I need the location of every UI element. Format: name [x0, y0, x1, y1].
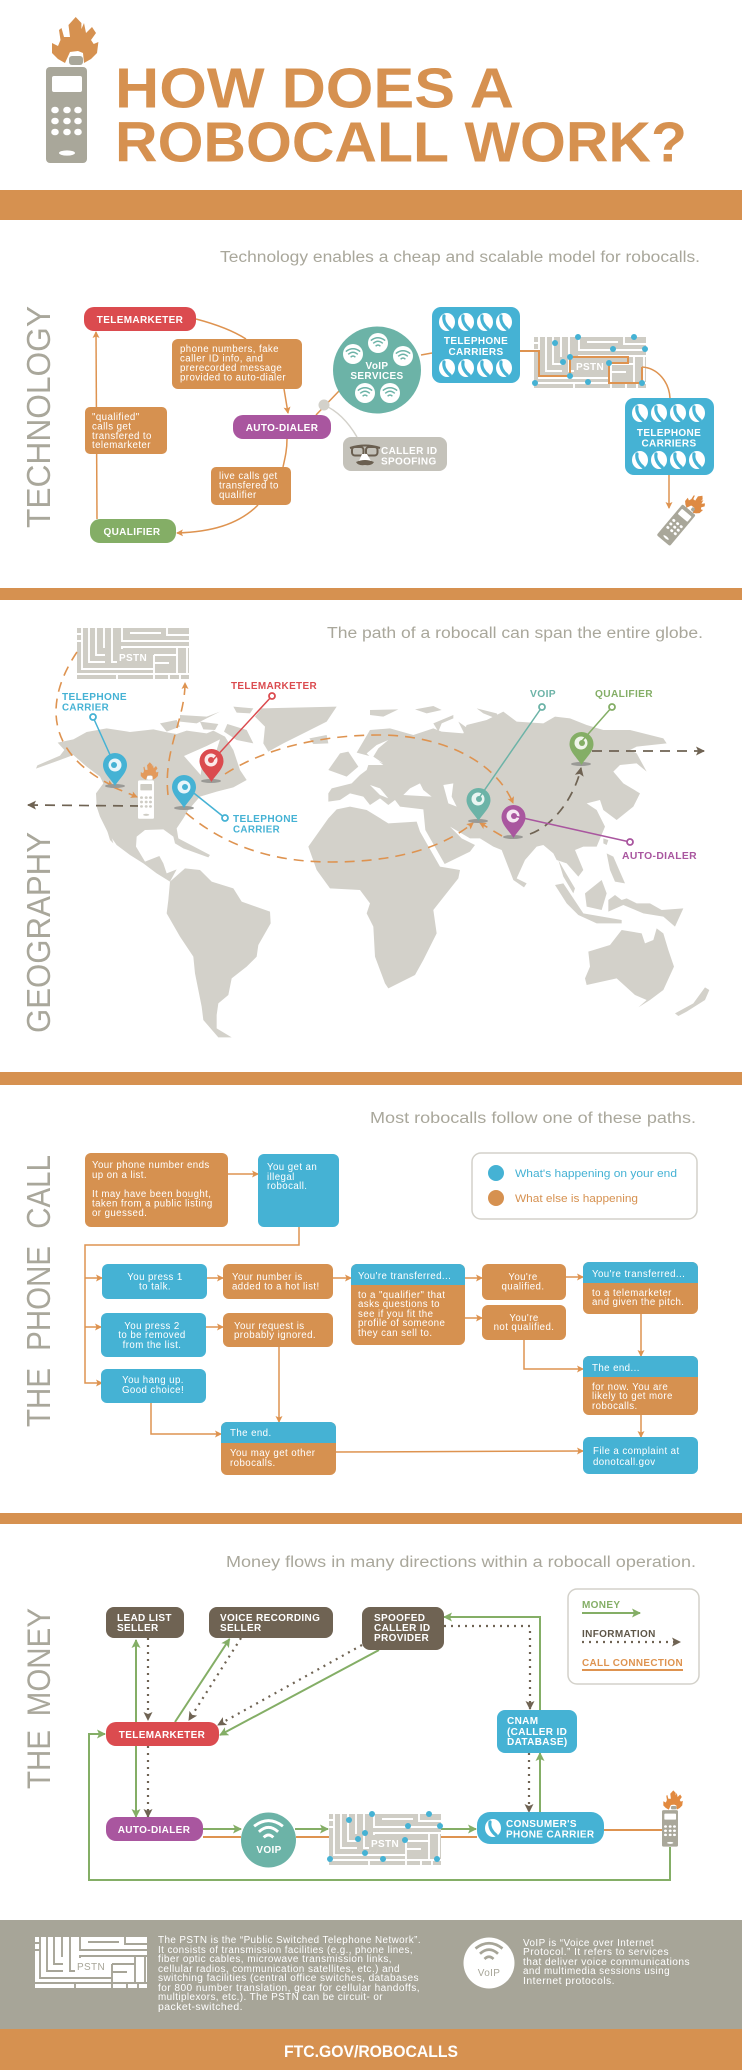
box: consumer's phone carrier: CONSUMER'S — [506, 1819, 577, 1830]
note: qualified calls: telemarketer — [92, 440, 151, 451]
box: the end for now: The end... — [592, 1363, 640, 1374]
graphic: pstn network — [327, 1811, 443, 1865]
box: transferred to qualifier: profile of someone — [358, 1318, 445, 1329]
legend: INFORMATION — [582, 1629, 656, 1640]
box: lead list seller: LEAD LIST — [117, 1613, 172, 1624]
box: press 1: You press 1 — [127, 1272, 183, 1283]
box: qualified: qualified. — [502, 1282, 544, 1292]
box: cnam — [497, 1710, 577, 1753]
box: caller id spoofing: SPOOFING — [381, 456, 437, 468]
pin: telephone carrier east — [172, 775, 298, 836]
box: auto-dialer — [233, 415, 331, 439]
graphic: pstn network — [520, 334, 648, 388]
note: inputs to auto-dialer: caller ID info, and — [180, 354, 263, 364]
legend — [472, 1153, 697, 1219]
box: transferred to qualifier: asks questions to — [358, 1299, 440, 1310]
box: telephone carriers 2 — [625, 398, 714, 475]
box: file a complaint — [583, 1437, 698, 1474]
box: spoofed caller id provider: PROVIDER — [374, 1633, 429, 1644]
subheading: the phone call: Most robocalls follow one of these paths. — [370, 1110, 696, 1127]
icon: burning phone — [662, 1790, 683, 1847]
arrow: pstn to carriers — [642, 367, 670, 398]
graphic: pstn network — [35, 1937, 147, 1988]
text: voip definition: and multimedia sessions using — [523, 1966, 670, 1977]
box: hot list: Your number is — [232, 1272, 303, 1283]
header band — [0, 190, 742, 220]
call connection lines — [203, 1830, 662, 1837]
box: telephone carriers — [432, 307, 520, 383]
icon: burning phone on map — [138, 762, 158, 819]
pin: qualifier — [570, 689, 653, 766]
dashed route: information — [28, 751, 704, 834]
box: lead list seller: SELLER — [117, 1623, 159, 1634]
label: telephone carrier: TELEPHONE — [233, 814, 298, 825]
box: press 2: You press 2 — [124, 1321, 180, 1332]
bubble: voip services: VoIP — [366, 361, 388, 372]
connector arrows: robocall loop — [96, 319, 432, 533]
box: transferred to qualifier — [351, 1264, 465, 1345]
text: pstn definition: fiber optic cables, microwave transmission links, — [158, 1954, 392, 1965]
subheading: the money: Money flows in many directions within a robocall operation. — [226, 1554, 696, 1571]
box: consumer's phone carrier — [477, 1812, 604, 1844]
box: voice recording seller: SELLER — [220, 1623, 262, 1634]
text: pstn definition: The PSTN is the “Public Switched Telephone Network”. — [158, 1935, 421, 1946]
icon: voip — [464, 1938, 514, 1988]
note: inputs to auto-dialer: prerecorded message — [180, 363, 282, 374]
box: qualifier — [90, 519, 176, 543]
information flows — [148, 1626, 530, 1817]
note: qualified calls: transfered to — [92, 431, 152, 442]
legend: MONEY — [582, 1600, 620, 1611]
graphic: pstn network: PSTN — [576, 362, 604, 373]
box: number on a list: It may have been bought, — [92, 1189, 211, 1200]
heading: technology: TECHNOLOGY — [20, 306, 57, 528]
box: the end — [221, 1422, 336, 1475]
box: illegal robocall: illegal — [267, 1172, 295, 1183]
icon: burning phone — [46, 17, 98, 163]
graphic: pstn network: PSTN — [119, 653, 147, 664]
heading: the phone call: THE PHONE CALL — [20, 1155, 57, 1427]
flow connectors — [85, 1174, 641, 1452]
box: caller id spoofing: CALLER ID — [381, 446, 437, 457]
box: hang up — [101, 1369, 206, 1403]
box: press 1: to talk. — [139, 1282, 171, 1292]
label: voip: VOIP — [530, 689, 556, 700]
section band — [0, 1513, 742, 1524]
section band — [0, 588, 742, 600]
pin: auto-dialer — [502, 805, 697, 862]
footer: url band — [0, 2029, 742, 2070]
box: illegal robocall — [258, 1154, 339, 1227]
note: live calls: transfered to — [219, 480, 279, 492]
legend: What else is happening — [515, 1193, 638, 1205]
title block — [46, 17, 687, 174]
legend — [568, 1589, 699, 1684]
text: voip definition: Internet protocols. — [523, 1976, 615, 1987]
title: ROBOCALL WORK? — [115, 110, 687, 174]
box: voice recording seller — [209, 1607, 333, 1638]
note: inputs to auto-dialer: provided to auto-dialer — [180, 372, 286, 384]
box: number on a list: up on a list. — [92, 1170, 147, 1181]
box: telemarketer — [84, 307, 196, 331]
text: pstn definition: packet-switched. — [158, 2002, 243, 2013]
icon: disguise glasses — [350, 446, 380, 465]
panel: the phone call — [20, 1110, 698, 1475]
box: qualifier: QUALIFIER — [103, 527, 161, 538]
note: live calls — [211, 467, 291, 505]
box: spoofed caller id provider — [362, 1607, 444, 1650]
note: live calls: qualifier — [219, 490, 257, 501]
box: consumer's phone carrier: PHONE CARRIER — [506, 1830, 595, 1840]
box: spoofed caller id provider: SPOOFED — [374, 1613, 425, 1624]
panel: technology — [20, 249, 714, 546]
bubble: voip: VOIP — [256, 1845, 282, 1856]
box: the end for now — [583, 1356, 698, 1415]
box: caller id spoofing — [343, 437, 447, 471]
footer: url band: FTC.GOV/ROBOCALLS — [284, 2042, 458, 2061]
box: telemarketer: TELEMARKETER — [119, 1730, 206, 1741]
note: qualified calls: calls get — [92, 422, 131, 432]
box: not qualified — [482, 1305, 566, 1340]
box: telephone carriers 2: TELEPHONE — [637, 428, 701, 439]
note: live calls: live calls get — [219, 471, 278, 482]
box: illegal robocall: robocall. — [267, 1181, 307, 1192]
box: transferred to telemarketer: You're transferred... — [592, 1269, 685, 1280]
box: not qualified: You're — [509, 1313, 539, 1324]
bubble: voip — [241, 1812, 296, 1868]
text: voip definition: Protocol.” It refers to services — [523, 1947, 669, 1958]
box: number on a list: taken from a public listing — [92, 1198, 213, 1210]
box: hang up: Good choice! — [122, 1385, 184, 1396]
box: the end: You may get other — [230, 1448, 316, 1459]
box: auto-dialer: AUTO-DIALER — [246, 423, 319, 434]
box: telephone carriers: CARRIERS — [448, 347, 504, 358]
panel: the money — [21, 1554, 699, 1880]
box: hot list — [223, 1264, 333, 1299]
legend: CALL CONNECTION — [582, 1658, 683, 1669]
title: HOW DOES A — [115, 56, 514, 120]
box: press 2: to be removed — [118, 1330, 186, 1341]
bubble: voip services: SERVICES — [350, 371, 404, 382]
box: request ignored: probably ignored. — [234, 1330, 316, 1341]
graphic: pstn network: PSTN — [371, 1839, 399, 1850]
note: inputs to auto-dialer — [172, 339, 302, 389]
box: the end: The end. — [230, 1428, 272, 1439]
box: cnam: DATABASE) — [507, 1737, 568, 1748]
box: press 2 — [101, 1313, 206, 1357]
box: voice recording seller: VOICE RECORDING — [220, 1613, 320, 1624]
text: voip definition: VoIP is “Voice over Internet — [523, 1938, 654, 1949]
section band — [0, 1072, 742, 1085]
box: telephone carriers: TELEPHONE — [444, 336, 508, 347]
box: press 2: from the list. — [123, 1340, 181, 1351]
box: qualified: You're — [508, 1272, 538, 1283]
box: press 1 — [102, 1264, 207, 1299]
text: voip definition: that deliver voice communications — [523, 1957, 690, 1968]
label: telephone carrier: CARRIER — [62, 702, 109, 714]
text: pstn definition: switching facilities (central office switches, databases — [158, 1973, 419, 1984]
box: qualified — [482, 1264, 566, 1300]
text: pstn definition: for 800 number translation, gear for cellular handoffs, — [158, 1983, 420, 1994]
box: spoofed caller id provider: CALLER ID — [374, 1623, 430, 1634]
box: lead list seller — [106, 1607, 184, 1638]
heading: geography: GEOGRAPHY — [20, 832, 57, 1033]
graphic: pstn network — [77, 628, 189, 679]
box: file a complaint: donotcall.gov — [593, 1457, 656, 1468]
pin: telephone carrier west — [62, 692, 127, 788]
box: transferred to telemarketer — [583, 1262, 698, 1314]
box: cnam: (CALLER ID — [507, 1727, 567, 1738]
subheading: technology: Technology enables a cheap and scalable model for robocalls. — [220, 249, 700, 266]
dot: spoofing junction — [318, 400, 330, 410]
subheading: geography: The path of a robocall can span the entire globe. — [327, 625, 703, 642]
box: file a complaint: File a complaint at — [593, 1446, 680, 1457]
text: pstn definition: cellular radios, communication satellites, etc.) and — [158, 1964, 400, 1975]
box: transferred to telemarketer: and given the pitch. — [592, 1297, 684, 1308]
pin: telemarketer — [200, 681, 317, 783]
box: number on a list: Your phone number ends — [92, 1160, 210, 1171]
box: transferred to qualifier: to a "qualifier" that — [358, 1290, 445, 1301]
box: telephone carriers 2: CARRIERS — [641, 438, 697, 450]
box: not qualified: not qualified. — [494, 1322, 554, 1333]
bubble: voip services — [333, 326, 421, 414]
pin: voip — [466, 689, 556, 823]
text: pstn definition: multiplexors, etc.). The PSTN can be circuit- or — [158, 1992, 383, 2003]
box: hot list: added to a hot list! — [232, 1282, 320, 1292]
legend: What's happening on your end — [515, 1168, 677, 1180]
box: transferred to telemarketer: to a telemarketer — [592, 1288, 672, 1299]
icon: tilted burning phone — [657, 489, 710, 546]
label: telemarketer: TELEMARKETER — [231, 681, 317, 692]
panel: geography — [20, 625, 709, 1037]
arrow: carriers to phone — [668, 475, 670, 508]
box: the end: robocalls. — [230, 1458, 276, 1469]
text: pstn definition: It consists of transmission facilities (e.g., phone lines, — [158, 1945, 413, 1956]
box: cnam: CNAM — [507, 1716, 538, 1727]
box: transferred to qualifier: see if you fit the — [358, 1309, 433, 1320]
box: number on a list — [85, 1153, 228, 1227]
label: telephone carrier: TELEPHONE — [62, 692, 127, 703]
label: qualifier: QUALIFIER — [595, 689, 653, 700]
box: transferred to qualifier: they can sell to. — [358, 1328, 432, 1339]
box: auto-dialer — [106, 1817, 203, 1841]
box: request ignored — [223, 1313, 333, 1347]
money flows — [89, 1617, 670, 1880]
icon: voip: VoIP — [478, 1968, 500, 1979]
box: auto-dialer: AUTO-DIALER — [118, 1825, 191, 1836]
world map — [36, 706, 709, 1037]
note: inputs to auto-dialer: phone numbers, fake — [180, 344, 279, 355]
box: the end for now: for now. You are — [592, 1382, 668, 1393]
label: auto-dialer: AUTO-DIALER — [622, 851, 697, 862]
box: transferred to qualifier: You're transferred... — [358, 1271, 451, 1282]
box: request ignored: Your request is — [234, 1321, 305, 1332]
graphic: pstn network: PSTN — [77, 1962, 105, 1973]
box: telemarketer — [106, 1722, 219, 1746]
dashed route: call connection — [56, 652, 513, 862]
box: the end for now: likely to get more — [592, 1391, 673, 1402]
box: hang up: You hang up. — [122, 1375, 184, 1386]
box: illegal robocall: You get an — [267, 1162, 317, 1173]
box: the end for now: robocalls. — [592, 1401, 638, 1412]
label: telephone carrier: CARRIER — [233, 824, 280, 836]
box: number on a list: or guessed. — [92, 1208, 147, 1219]
footer: definitions — [0, 1920, 742, 2029]
note: qualified calls — [85, 407, 167, 454]
note: qualified calls: "qualified" — [92, 412, 140, 423]
heading: the money: THE MONEY — [21, 1608, 57, 1789]
box: telemarketer: TELEMARKETER — [97, 315, 184, 326]
